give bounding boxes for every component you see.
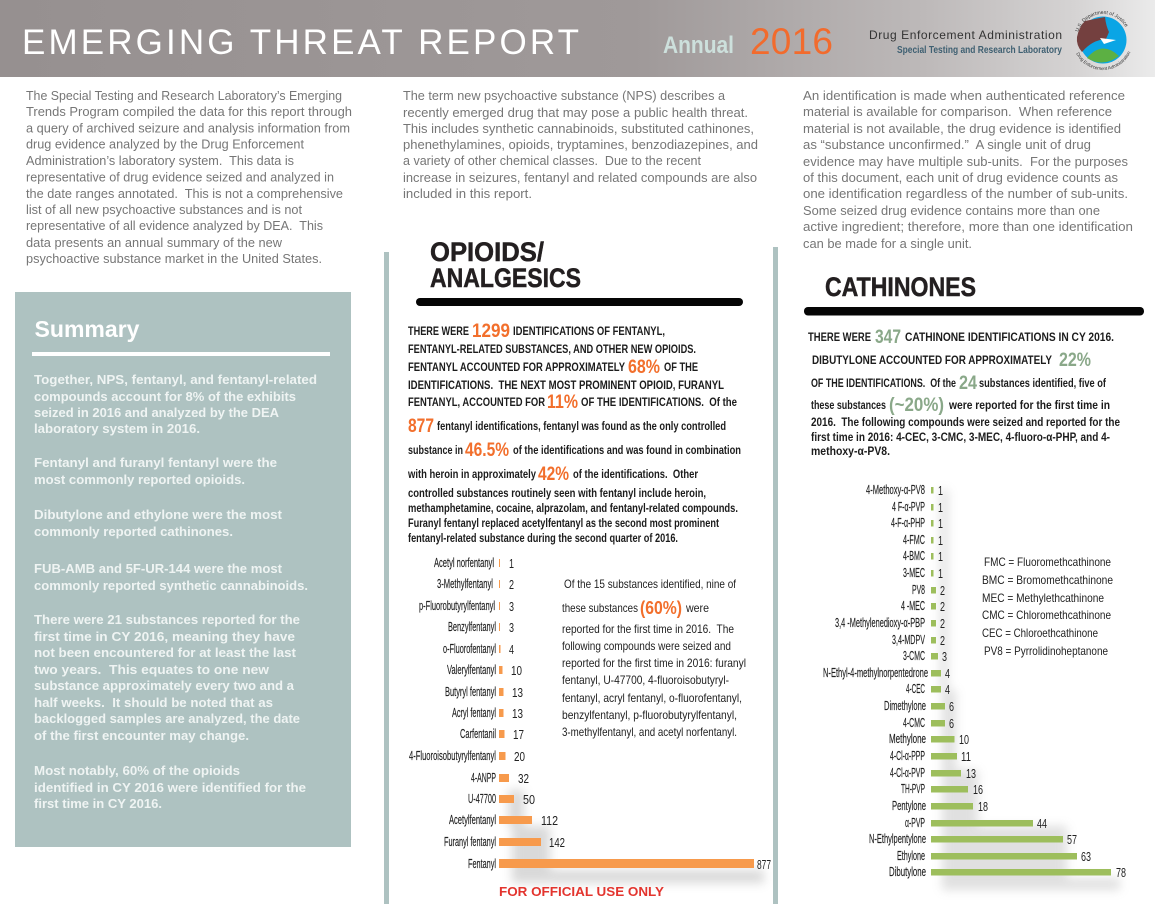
opioids text block: 68% <box>628 357 660 378</box>
bars <box>499 559 754 868</box>
cathinones text block: 22% <box>1059 350 1091 371</box>
intro text: column 3: as “substance unconfirmed.” A single unit of drug <box>803 137 1091 152</box>
opioids text block: substance in <box>408 443 463 457</box>
bar labels: p-Fluorobutyrylfentanyl <box>419 599 495 613</box>
agency name: Drug Enforcement Administration <box>869 28 1062 42</box>
intro text: column 1: the date ranges annotated. This is not a comprehensive <box>26 186 343 201</box>
heading: cathinones: CATHINONES <box>825 272 976 302</box>
opioid chart note: Of the 15 substances identified, nine of <box>564 577 737 591</box>
cathinones text block: (~20%) <box>889 395 944 416</box>
intro text: column 1: list of all new psychoactive substances and is not <box>26 202 302 217</box>
bar values: 78 <box>1116 865 1126 880</box>
opioids text block: 46.5% <box>465 440 509 461</box>
bar values: 1 <box>938 533 943 548</box>
title: EMERGING THREAT REPORT <box>22 23 579 62</box>
heading: opioids / analgesics <box>416 237 743 306</box>
bar labels <box>823 483 928 879</box>
bar values: 10 <box>511 663 522 678</box>
opioid chart note: following compounds were seized and <box>562 639 731 653</box>
bar values: 1 <box>938 500 943 515</box>
bar values: 13 <box>512 685 523 700</box>
bar labels: N-Ethylpentylone <box>869 832 926 846</box>
opioid chart note: reported for the first time in 2016: furanyl <box>562 656 746 670</box>
cathinones text block: were reported for the first time in <box>948 398 1110 412</box>
legend: cathinone abbreviations: CMC = Chloromethcathinone <box>982 608 1111 622</box>
bar labels: 4-CMC <box>903 716 925 730</box>
bar labels: 3-Methylfentanyl <box>437 577 493 591</box>
summary text: Fentanyl and furanyl fentanyl were the <box>34 456 277 470</box>
bar labels: 3,4-MDPV <box>892 633 925 647</box>
summary text <box>34 373 317 811</box>
icon: DEA seal: U.S. Department of Justice <box>1075 11 1128 32</box>
intro text: column 1: psychoactive substance market in the United States. <box>26 251 322 266</box>
bar values: 6 <box>949 716 954 731</box>
bar labels: TH-PVP <box>901 782 925 796</box>
opioids text block: controlled substances routinely seen with fentanyl include heroin, <box>408 486 706 500</box>
intro text: column 1: representative of drug evidence seized and analyzed in <box>26 170 334 184</box>
bar labels: Dibutylone <box>889 865 926 879</box>
bar values: 17 <box>513 727 524 742</box>
bar values: 3 <box>942 649 947 664</box>
footer: official use notice: FOR OFFICIAL USE ONLY <box>499 884 664 899</box>
cathinones text block: substances identified, five of <box>979 376 1107 390</box>
bar labels: 4 -MEC <box>901 599 925 613</box>
cathinones text block: 24 <box>959 373 977 394</box>
opioid chart note <box>562 577 746 739</box>
opioids text block: THERE WERE <box>408 324 469 338</box>
intro text: column 2: a variety of other chemical classes. Due to the recent <box>403 153 701 168</box>
intro text: column 3: one identification regardless of the number of sub-units. <box>803 186 1128 201</box>
opioids text block: 11% <box>547 392 578 413</box>
summary text: not been encountered for at least the last <box>34 646 297 660</box>
bar values: 2 <box>509 577 514 592</box>
opioids text block: fentanyl-related substance during the second quarter of 2016. <box>408 531 678 545</box>
bar labels: 4-Cl-α-PVP <box>890 766 925 780</box>
intro text: column 2 <box>403 88 758 201</box>
bar labels: Valerylfentanyl <box>447 663 496 677</box>
bar values: 11 <box>961 749 971 764</box>
bar labels: Butyryl fentanyl <box>445 685 496 699</box>
bar values: 57 <box>1067 832 1077 847</box>
bar labels: Pentylone <box>892 799 926 813</box>
icon: DEA seal <box>1075 11 1130 70</box>
bar labels: U-47700 <box>468 792 496 806</box>
intro text: column 3: An identification is made when authenticated reference <box>803 88 1125 103</box>
cathinones text block: methoxy-α-PV8. <box>811 444 890 458</box>
bar labels: 4-FMC <box>903 533 925 547</box>
icon: DEA seal: Drug Enforcement Administration <box>1076 52 1130 70</box>
intro text: column 1: representative of all evidence analyzed by DEA. This <box>26 218 323 233</box>
opioid chart note: 3-methylfentanyl, and acetyl norfentanyl. <box>562 725 737 739</box>
cathinones text block: 347 <box>875 327 901 348</box>
bar values: 10 <box>959 732 969 747</box>
opioids text block: IDENTIFICATIONS OF FENTANYL, <box>513 324 665 338</box>
opioids text block: 1299 <box>472 321 510 342</box>
summary text: identified in CY 2016 were identified for the <box>34 781 306 795</box>
intro text: column 2: phenethylamines, opioids, tryptamines, benzodiazepines, and <box>403 137 758 152</box>
intro text: column 3: Some seized drug evidence contains more than one <box>803 203 1100 218</box>
bar values: 18 <box>978 799 988 814</box>
opioids text block: 877 <box>408 416 434 437</box>
laboratory name: Special Testing and Research Laboratory <box>897 44 1062 56</box>
bar labels: Acryl fentanyl <box>452 706 496 720</box>
opioid chart note: these substances <box>562 601 638 615</box>
bar labels: Carfentanil <box>460 727 496 741</box>
bar values: 50 <box>523 792 535 807</box>
opioids text block: fentanyl identifications, fentanyl was found as the only controlled <box>437 419 726 433</box>
heading: cathinones <box>804 272 1144 316</box>
bar labels: 3,4 -Methylenedioxy-α-PBP <box>835 616 925 630</box>
bar labels: 4-Methoxy-α-PV8 <box>866 483 925 497</box>
bar values: 1 <box>938 566 943 581</box>
bar values: 4 <box>945 682 950 697</box>
intro text: column 2: included in this report. <box>403 186 532 201</box>
bar values: 142 <box>549 835 565 850</box>
legend: cathinone abbreviations: CEC = Chloroethcathinone <box>982 626 1098 640</box>
bar values: 1 <box>509 556 514 571</box>
intro text: column 3: material is available for comparison. When reference <box>803 104 1112 119</box>
intro text: column 1 <box>26 88 352 266</box>
opioids text block: of the identifications and was found in combination <box>513 443 741 457</box>
bar labels: 4-ANPP <box>471 771 496 785</box>
bar labels: PV8 <box>912 583 925 597</box>
bar labels: Furanyl fentanyl <box>444 835 496 849</box>
bar labels: Dimethylone <box>884 699 926 713</box>
bar values: 32 <box>518 771 529 786</box>
bar labels: N-Ethyl-4-methylnorpentedrone <box>823 666 928 680</box>
summary text: Most notably, 60% of the opioids <box>34 764 240 778</box>
cathinones text block: OF THE IDENTIFICATIONS. Of the <box>811 376 956 390</box>
summary text: backlogged samples are analyzed, the date <box>34 712 300 726</box>
bar labels: 4-Fluoroisobutyrylfentanyl <box>409 749 496 763</box>
bar labels: 4-CEC <box>906 682 925 696</box>
summary text: laboratory system in 2016. <box>34 422 200 436</box>
intro text: column 1: The Special Testing and Research Laboratory’s Emerging <box>26 88 342 103</box>
summary text: There were 21 substances reported for the <box>34 613 300 627</box>
summary text: commonly reported cathinones. <box>34 525 233 539</box>
heading: opioids / analgesics: ANALGESICS <box>430 263 581 293</box>
bar values: 2 <box>940 599 945 614</box>
bar labels: 4-BMC <box>903 549 925 563</box>
intro text: column 3 <box>803 88 1133 251</box>
bar values: 13 <box>512 706 523 721</box>
bar labels: Fentanyl <box>468 857 496 871</box>
summary text: FUB-AMB and 5F-UR-144 were the most <box>34 562 283 576</box>
opioids text block: OF THE IDENTIFICATIONS. Of the <box>581 395 737 409</box>
opioids text block: with heroin in approximately <box>407 467 536 481</box>
bar values: 16 <box>973 782 983 797</box>
bar chart: opioid identifications <box>409 556 771 883</box>
bar values: 13 <box>966 766 976 781</box>
summary heading: Summary <box>34 316 140 342</box>
opioids text block: 42% <box>538 464 569 485</box>
bar values: 1 <box>938 516 943 531</box>
summary text: first time in CY 2016, meaning they have <box>34 630 295 644</box>
legend: cathinone abbreviations: MEC = Methylethcathinone <box>982 591 1104 605</box>
intro text: column 1: data presents an annual summary of the new <box>26 235 283 250</box>
bar labels: 3-MEC <box>903 566 925 580</box>
intro text: column 3: material is not available, the drug evidence is identified <box>803 121 1121 136</box>
bar values <box>938 483 1126 880</box>
bar labels: Acetylfentanyl <box>449 813 496 827</box>
legend: cathinone abbreviations: BMC = Bromomethcathinone <box>982 573 1113 587</box>
bar values: 3 <box>509 620 514 635</box>
intro text: column 3: can be made for a single unit. <box>803 236 972 251</box>
bar values: 1 <box>938 549 943 564</box>
bar labels: 4 F-α-PVP <box>892 500 925 514</box>
cathinones text block: DIBUTYLONE ACCOUNTED FOR APPROXIMATELY <box>812 353 1052 367</box>
legend: cathinone abbreviations: PV8 = Pyrrolidinoheptanone <box>984 644 1108 658</box>
bar values: 6 <box>949 699 954 714</box>
opioids text block: methamphetamine, cocaine, alprazolam, and fentanyl-related compounds. <box>408 501 738 515</box>
bar values: 20 <box>514 749 525 764</box>
opioids text block <box>407 321 741 545</box>
bar labels: o-Fluorofentanyl <box>443 642 496 656</box>
legend: cathinone abbreviations <box>982 555 1113 658</box>
summary text: seized in 2016 and analyzed by the DEA <box>34 406 279 420</box>
legend: cathinone abbreviations: FMC = Fluoromethcathinone <box>984 555 1111 569</box>
summary text: of the first encounter may change. <box>34 729 249 743</box>
bar values: 2 <box>940 583 945 598</box>
bar values: 4 <box>509 642 514 657</box>
bar values: 2 <box>940 633 945 648</box>
intro text: column 3: active ingredient; therefore, more than one identification <box>803 219 1133 234</box>
summary text: first time in CY 2016. <box>34 797 162 811</box>
edition label: Annual <box>663 32 734 59</box>
bar labels: Acetyl norfentanyl <box>434 556 494 570</box>
bar values: 877 <box>757 857 771 872</box>
bar values: 63 <box>1081 849 1091 864</box>
summary text: Together, NPS, fentanyl, and fentanyl-related <box>34 373 317 387</box>
intro text: column 2: This includes synthetic cannabinoids, substituted cathinones, <box>403 121 754 136</box>
cathinones text block <box>808 327 1120 458</box>
summary text: half weeks. It should be noted that as <box>34 696 273 710</box>
intro text: column 1: a query of archived seizure and analysis information from <box>26 120 350 136</box>
intro text: column 1: drug evidence analyzed by the Drug Enforcement <box>26 136 304 152</box>
bar values: 44 <box>1037 816 1047 831</box>
bar values <box>509 556 771 872</box>
opioid chart note: fentanyl, U-47700, 4-fluoroisobutyryl- <box>562 673 729 687</box>
opioid chart note: reported for the first time in 2016. The <box>562 622 734 636</box>
opioid chart note: (60%) <box>640 598 682 618</box>
bar labels <box>409 556 496 871</box>
bar values: 4 <box>945 666 950 681</box>
bar values: 1 <box>938 483 943 498</box>
opioids text block: Furanyl fentanyl replaced acetylfentanyl as the second most prominent <box>408 516 719 530</box>
opioids text block: OF THE <box>664 360 698 374</box>
summary text: commonly reported synthetic cannabinoids. <box>34 579 308 593</box>
bars <box>931 487 1111 876</box>
bar values: 3 <box>509 599 514 614</box>
summary text: compounds account for 8% of the exhibits <box>34 390 296 404</box>
bar labels: 4-Cl-α-PPP <box>890 749 925 763</box>
opioids text block: IDENTIFICATIONS. THE NEXT MOST PROMINENT OPIOID, FURANYL <box>408 378 724 392</box>
opioids text block: FENTANYL ACCOUNTED FOR APPROXIMATELY <box>408 360 625 374</box>
bar labels: 3-CMC <box>903 649 925 663</box>
cathinones text block: CATHINONE IDENTIFICATIONS IN CY 2016. <box>905 330 1114 344</box>
opioids text block: of the identifications. Other <box>573 467 698 481</box>
bar labels: Benzylfentanyl <box>448 620 496 634</box>
intro text: column 2: The term new psychoactive substance (NPS) describes a <box>403 88 726 103</box>
intro text: column 1: Trends Program compiled the data for this report through <box>26 104 352 119</box>
bar labels: Ethylone <box>897 849 925 863</box>
intro text: column 1: Administration’s laboratory system. This data is <box>26 153 294 168</box>
intro text: column 2: increase in seizures, fentanyl and related compounds are also <box>403 170 757 185</box>
bar labels: Methylone <box>889 732 926 746</box>
opioid chart note: fentanyl, acryl fentanyl, o-fluorofentanyl, <box>562 691 742 705</box>
opioid chart note: were <box>685 601 709 615</box>
panel: summary <box>15 292 351 847</box>
bar labels: 4-F-α-PHP <box>891 516 925 530</box>
bar values: 112 <box>541 813 558 828</box>
heading: opioids / analgesics: OPIOIDS/ <box>430 237 544 267</box>
cathinones text block: THERE WERE <box>808 330 871 344</box>
year: 2016 <box>750 21 833 62</box>
bar chart: cathinone identifications <box>823 483 1126 890</box>
intro text: column 3: evidence may have multiple sub-units. For the purposes <box>803 154 1128 169</box>
intro text: column 3: of this document, each unit of drug evidence counts as <box>803 170 1118 185</box>
bar labels: α-PVP <box>905 816 925 830</box>
opioid chart note: benzylfentanyl, p-fluorobutyrylfentanyl, <box>562 708 737 722</box>
cathinones text block: these substances <box>811 398 886 412</box>
summary text: Dibutylone and ethylone were the most <box>34 508 283 522</box>
opioids text block: FENTANYL, ACCOUNTED FOR <box>408 395 545 409</box>
opioids text block: FENTANYL-RELATED SUBSTANCES, AND OTHER NEW OPIOIDS. <box>408 342 696 356</box>
header banner <box>0 0 1155 77</box>
summary text: substance approximately every two and a <box>34 679 295 693</box>
summary text: two years. This equates to one new <box>34 663 269 677</box>
summary text: most commonly reported opioids. <box>34 473 245 487</box>
intro text: column 2: recently emerged drug that may pose a public health threat. <box>403 105 748 120</box>
bar values: 2 <box>940 616 945 631</box>
